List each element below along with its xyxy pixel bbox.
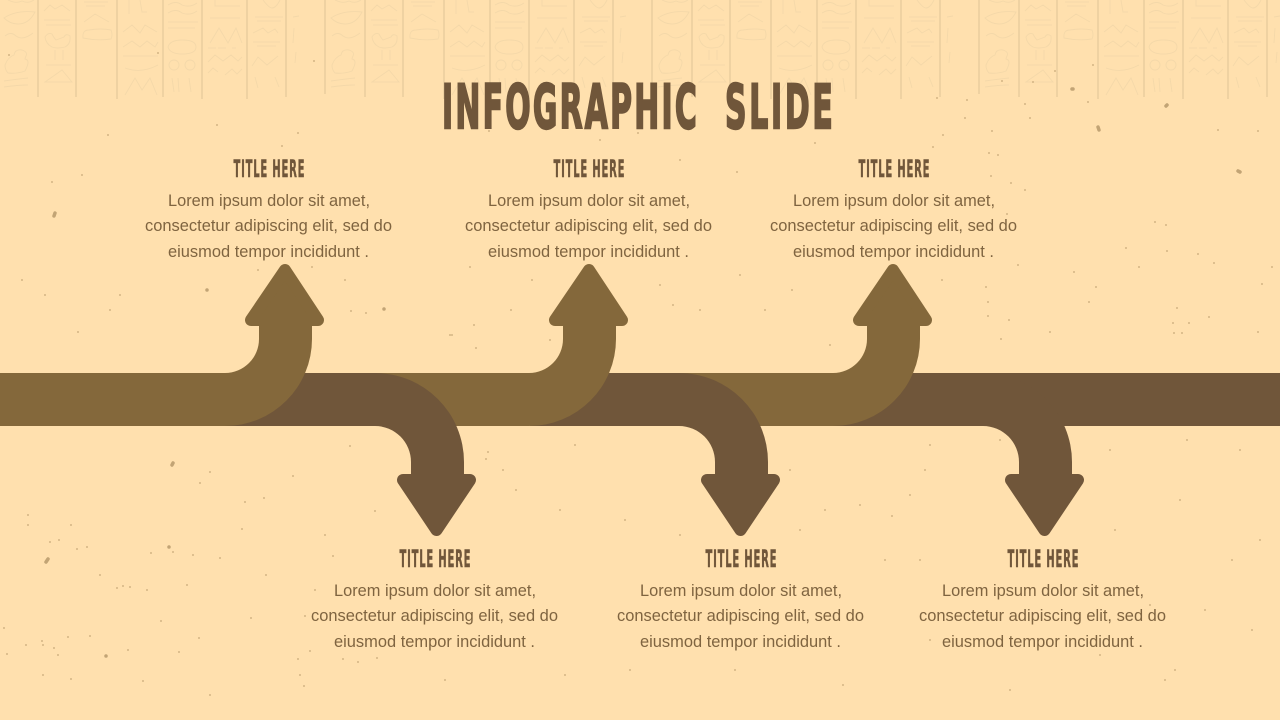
- hieroglyph band: [4, 0, 1280, 99]
- down arrow 3 with band to right edge: [820, 373, 1280, 530]
- text block: bottom 2: consectetur adipiscing elit, sed do: [617, 607, 864, 625]
- title: INFOGRAPHIC: [442, 72, 697, 143]
- text block: bottom 2: [617, 546, 864, 651]
- text block: top 1: [145, 156, 392, 261]
- text block: top 3: TITLE HERE: [859, 156, 929, 184]
- text block: bottom 3: Lorem ipsum dolor sit amet,: [942, 582, 1144, 600]
- text block: bottom 3: TITLE HERE: [1008, 546, 1078, 574]
- text block: top 2: Lorem ipsum dolor sit amet,: [488, 192, 690, 210]
- text block: bottom 1: Lorem ipsum dolor sit amet,: [334, 582, 536, 600]
- text block: bottom 3: [919, 546, 1166, 651]
- down arrow 1: [215, 373, 470, 530]
- text block: top 2: TITLE HERE: [554, 156, 624, 184]
- text block: bottom 3: eiusmod tempor incididunt .: [942, 633, 1143, 651]
- text block: top 3: consectetur adipiscing elit, sed do: [770, 217, 1017, 235]
- text block: bottom 2: eiusmod tempor incididunt .: [640, 633, 841, 651]
- text block: bottom 1: [311, 546, 558, 651]
- text block: top 2: [465, 156, 712, 261]
- title: [442, 72, 833, 143]
- text block: bottom 3: consectetur adipiscing elit, sed do: [919, 607, 1166, 625]
- text block: top 3: eiusmod tempor incididunt .: [793, 243, 994, 261]
- text block: top 3: [770, 156, 1017, 261]
- text block: top 2: consectetur adipiscing elit, sed do: [465, 217, 712, 235]
- text block: top 1: consectetur adipiscing elit, sed do: [145, 217, 392, 235]
- arrow timeline: [0, 270, 1280, 530]
- text block: top 3: Lorem ipsum dolor sit amet,: [793, 192, 995, 210]
- text block: bottom 2: TITLE HERE: [706, 546, 776, 574]
- down arrow 2: [530, 373, 774, 530]
- text block: bottom 1: consectetur adipiscing elit, sed do: [311, 607, 558, 625]
- text block: bottom 1: TITLE HERE: [400, 546, 470, 574]
- text block: top 2: eiusmod tempor incididunt .: [488, 243, 689, 261]
- up arrow 2: [340, 270, 622, 426]
- text block: top 1: Lorem ipsum dolor sit amet,: [168, 192, 370, 210]
- text block: top 1: TITLE HERE: [234, 156, 304, 184]
- text block: bottom 2: Lorem ipsum dolor sit amet,: [640, 582, 842, 600]
- text block: top 1: eiusmod tempor incididunt .: [168, 243, 369, 261]
- up arrow 3: [660, 270, 926, 426]
- up arrow 1: [0, 270, 318, 426]
- text block: bottom 1: eiusmod tempor incididunt .: [334, 633, 535, 651]
- title: SLIDE: [725, 72, 833, 143]
